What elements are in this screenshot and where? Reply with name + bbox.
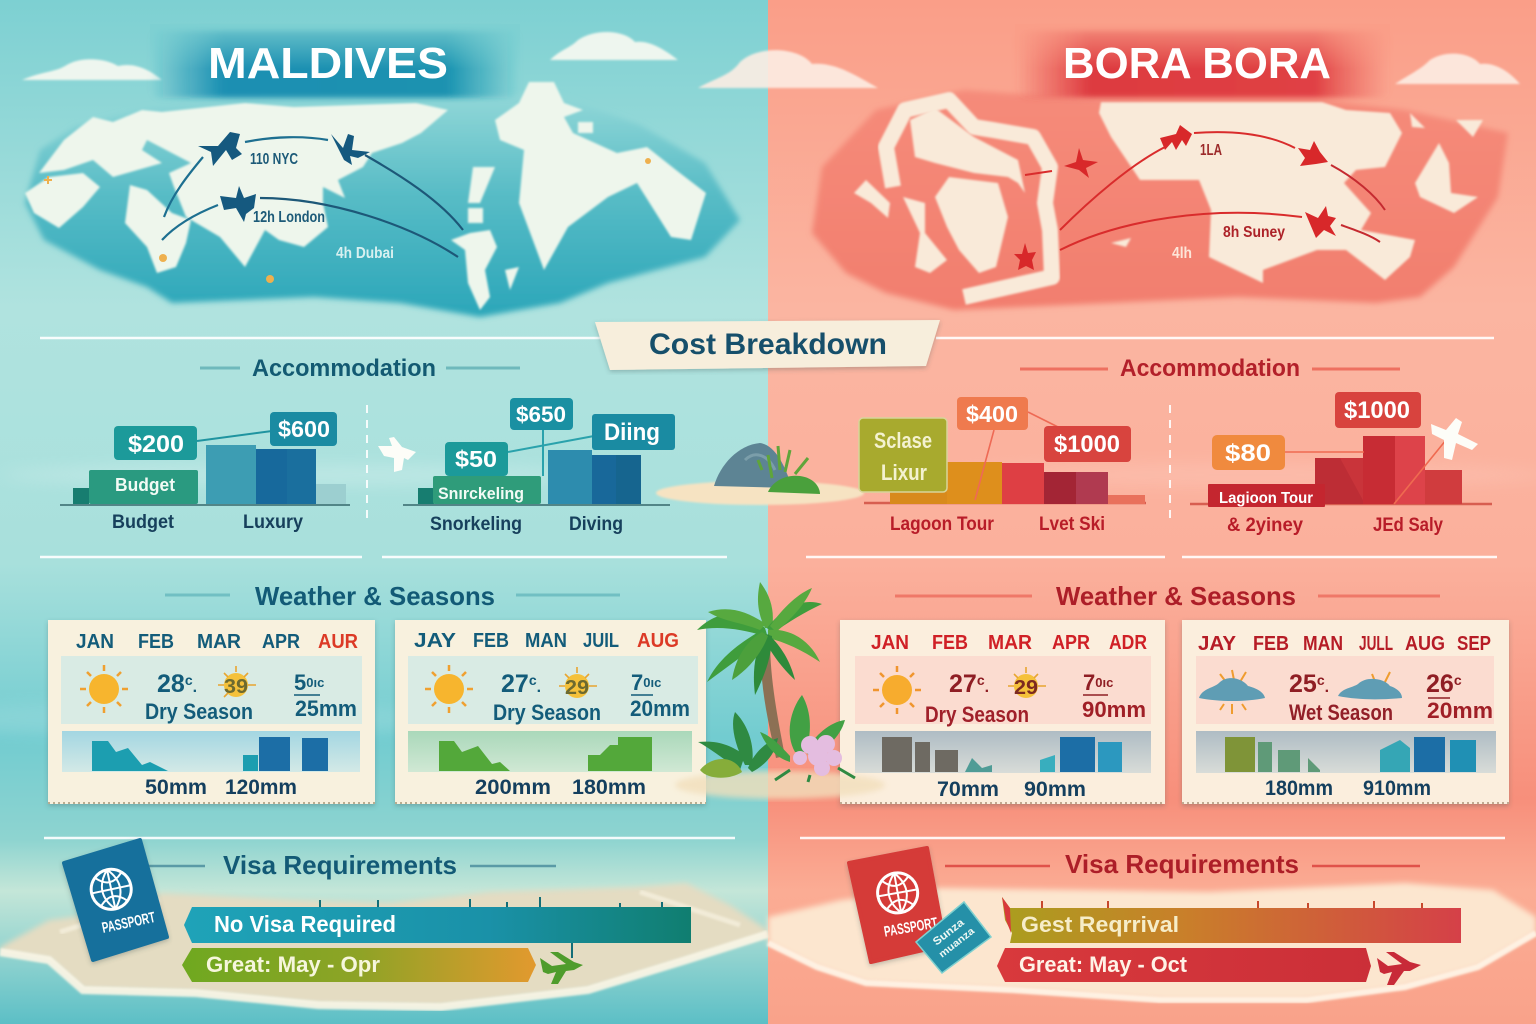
weather card: Maldives 2 — [395, 620, 706, 804]
weather card: Bora Bora 1: APR — [1052, 632, 1090, 654]
weather card: Maldives 1: 120mm — [225, 776, 297, 799]
weather card: Bora Bora 1: 70mm — [937, 778, 999, 801]
value tag: $1000: $1000 — [1054, 431, 1120, 458]
value tag: $1000 — [1335, 392, 1421, 428]
heading: Weather & Seasons (Maldives): Weather & Seasons — [255, 581, 495, 611]
value tag: $650 — [510, 398, 573, 430]
heading ribbon: Cost Breakdown: Cost Breakdown — [649, 328, 887, 361]
background: Bora Bora side — [768, 0, 1536, 1024]
icon: small sun 29 — [559, 667, 597, 699]
weather card: Maldives 2: MAN — [525, 630, 567, 652]
icon: white plane (Bora Bora cost) — [1431, 418, 1478, 460]
bar chart: Maldives activities — [403, 398, 675, 535]
timing bar: Great May - Oct — [997, 948, 1371, 982]
weather card: Maldives 2: . — [537, 679, 541, 696]
weather card: Maldives 2: JUIL — [583, 630, 619, 652]
weather card: Bora Bora 1: JAN — [871, 632, 909, 654]
weather card: Bora Bora 1: . — [985, 679, 989, 696]
flight labels: 4lh — [1172, 245, 1192, 262]
world map: Bora Bora flights — [812, 90, 1508, 310]
title banner: BORA BORA: BORA BORA — [1063, 39, 1331, 88]
heading: Visa Requirements (Maldives): Visa Requirements — [223, 850, 457, 880]
weather card: Maldives 1: JAN — [76, 631, 114, 653]
value tag: $200 — [114, 426, 197, 460]
plane icons — [198, 132, 370, 222]
bar chart: Bora Bora activities: JEd Saly — [1373, 515, 1443, 536]
weather card: Bora Bora 2: 20mm — [1427, 698, 1493, 723]
icon: small sun 29: 29 — [565, 677, 589, 699]
visa bar: No Visa Required — [184, 897, 691, 958]
value tag: Diing: Diing — [604, 419, 660, 446]
bar chart: Maldives activities: Snırckeling — [438, 484, 524, 503]
weather card: Maldives 2: 7 — [631, 670, 643, 695]
weather card: Maldives 1: FEB — [138, 631, 174, 653]
weather card: Maldives 1: 50mm — [145, 776, 207, 799]
flight route lines — [162, 137, 463, 257]
illustration: palm tree island — [675, 582, 885, 799]
weather card: Maldives 1: MAR — [197, 631, 242, 653]
bar chart: Maldives activities: Diving — [569, 514, 623, 535]
icon: visa stamp card: muanza — [937, 926, 977, 960]
icon: cloud with sun small — [1338, 672, 1402, 699]
weather card: Maldives 2: AUG — [637, 630, 679, 652]
icon: green plane — [540, 952, 583, 984]
weather card: Bora Bora 2: 26 — [1426, 670, 1454, 698]
heading ribbon: Cost Breakdown — [595, 320, 940, 370]
visa bar: No Visa Required: No Visa Required — [214, 911, 396, 937]
background: Maldives side — [0, 0, 768, 1024]
bottom beach: Bora Bora — [768, 883, 1536, 1000]
value tag: $600: $600 — [278, 416, 330, 442]
icon: sun — [80, 665, 128, 713]
weather card: Maldives 2: c — [529, 672, 537, 688]
weather card: Maldives 2: 0ıc — [643, 675, 661, 690]
bar chart: Bora Bora activities: & 2yiney — [1227, 515, 1303, 536]
bar chart: Bora Bora accommodation — [859, 397, 1146, 535]
weather card: Bora Bora 2: c — [1454, 672, 1462, 688]
weather card: Bora Bora 1: 7 — [1083, 670, 1095, 695]
weather card: Maldives 2: 20mm — [630, 696, 690, 721]
icon: visa stamp card: Sunza — [931, 916, 967, 948]
weather card: Bora Bora 1 — [840, 620, 1165, 804]
title banner: BORA BORA — [1015, 24, 1390, 98]
value tag: Diing — [592, 414, 675, 450]
weather card: Maldives 2: 27 — [501, 670, 529, 698]
timing bar: Great May - Opr: Great: May - Opr — [206, 952, 380, 977]
heading: Visa Requirements (Bora Bora): Visa Requirements — [1065, 849, 1299, 879]
weather card: Maldives 1: Dry Season — [145, 699, 253, 724]
weather card: Maldives 1: 28 — [157, 670, 185, 698]
weather card: Bora Bora 2: FEB — [1253, 633, 1289, 655]
value tag: $400 — [957, 397, 1028, 430]
weather card: Bora Bora 1: c — [977, 672, 985, 688]
bar chart: Bora Bora activities — [1190, 392, 1492, 536]
label box: Selase Luxur: Lixur — [881, 460, 927, 485]
weather card: Maldives 1: APR — [262, 631, 300, 653]
weather card: Bora Bora 2: . — [1325, 679, 1329, 696]
weather card: Bora Bora 1: FEB — [932, 632, 968, 654]
bar chart: Bora Bora accommodation: Lagoon Tour — [890, 514, 995, 535]
value tag: $1000 — [1044, 426, 1131, 462]
timing bar: Great May - Opr — [182, 948, 536, 982]
value tag: $400: $400 — [966, 401, 1018, 427]
icon: sun — [425, 665, 473, 713]
weather card: Bora Bora 1: 0ıc — [1095, 675, 1113, 690]
weather card: Bora Bora 1: Dry Season — [925, 702, 1029, 727]
weather card: Bora Bora 2: AUG — [1405, 633, 1445, 655]
weather card: Bora Bora 2: MAN — [1303, 633, 1343, 655]
weather card: Maldives 2: FEB — [473, 630, 509, 652]
weather card: Maldives 2: 180mm — [572, 776, 646, 799]
weather card: Maldives 1: AUR — [318, 631, 359, 653]
weather card: Bora Bora 2: c — [1317, 672, 1325, 688]
value tag: $50 — [445, 442, 508, 476]
value tag: $50: $50 — [455, 446, 497, 472]
flight labels — [250, 151, 394, 262]
visa bar: Gest Reqrrival — [1002, 897, 1461, 943]
world map: Maldives flights — [25, 82, 740, 317]
value tag: $600 — [270, 412, 337, 446]
weather card: Bora Bora 2: 180mm — [1265, 777, 1333, 800]
icon: small sun 39 — [218, 666, 256, 698]
weather card: Maldives 1: 0ıc — [306, 675, 324, 690]
weather card: Maldives 1: . — [193, 679, 197, 696]
icon: passport (Bora Bora) — [849, 848, 945, 962]
value tag: $200: $200 — [128, 431, 184, 458]
weather card: Bora Bora 2: Wet Season — [1289, 700, 1393, 725]
weather card: Bora Bora 2: JAY — [1198, 633, 1237, 655]
flight route lines — [1025, 132, 1385, 250]
value tag: $650: $650 — [516, 402, 566, 427]
weather card: Bora Bora 1: 90mm — [1082, 697, 1146, 722]
icon: passport (Maldives): PASSPORT — [100, 909, 157, 937]
bar chart: Maldives activities: Snorkeling — [430, 514, 522, 535]
weather card: Bora Bora 1: 90mm — [1024, 778, 1086, 801]
bar chart: Bora Bora accommodation: Lvet Ski — [1039, 514, 1105, 535]
icon: sun — [873, 666, 921, 714]
small orange markers — [44, 158, 651, 283]
flight labels: 8h Suney — [1223, 224, 1285, 241]
icon: small sun 29: 29 — [1014, 677, 1038, 699]
visa bar: Gest Reqrrival: Gest Reqrrival — [1021, 912, 1179, 937]
icon: passport (Bora Bora): PASSPORT — [883, 915, 939, 941]
plane icons — [1014, 125, 1336, 270]
weather card: Maldives 1 — [48, 620, 375, 804]
bar chart: Maldives accommodation: Budget — [115, 475, 175, 495]
heading: Weather & Seasons (Bora Bora): Weather & Seasons — [1056, 581, 1296, 611]
icon: small sun 39: 39 — [224, 676, 248, 698]
weather card: Bora Bora 2: JULL — [1359, 633, 1393, 655]
timing bar: Great May - Oct: Great: May - Oct — [1019, 952, 1188, 977]
flight labels: 1LA — [1200, 142, 1222, 159]
weather card: Bora Bora 2: 25 — [1289, 670, 1317, 698]
weather card: Bora Bora 2: 910mm — [1363, 777, 1431, 800]
title banner: MALDIVES: MALDIVES — [208, 39, 448, 88]
clouds — [22, 32, 1520, 88]
weather card: Maldives 2: 200mm — [475, 776, 551, 799]
heading: Accommodation (Bora Bora): Accommodation — [1120, 355, 1300, 382]
bottom beach: Maldives — [0, 883, 768, 1007]
weather card: Bora Bora 2 — [1182, 620, 1509, 804]
bar chart: Maldives accommodation: Budget — [112, 512, 175, 533]
flight labels: 4h Dubai — [336, 245, 394, 262]
weather card: Bora Bora 2: SEP — [1457, 633, 1491, 655]
icon: visa stamp card — [916, 902, 991, 973]
weather card: Bora Bora 1: ADR — [1109, 632, 1147, 654]
label box: Selase Luxur: Sclase — [874, 428, 932, 453]
weather card: Bora Bora 1: 27 — [949, 670, 977, 698]
icon: white plane (Maldives cost) — [378, 437, 416, 472]
flight labels: 12h London — [253, 209, 325, 226]
label box: Selase Luxur — [859, 418, 947, 492]
weather card: Maldives 2: JAY — [414, 630, 457, 652]
bar chart: Maldives accommodation — [60, 412, 350, 533]
value tag: $80: $80 — [1225, 440, 1271, 467]
flight labels: 110 NYC — [250, 151, 298, 168]
icon: red plane — [1377, 952, 1421, 985]
value tag: $80 — [1212, 435, 1285, 470]
weather card: Maldives 1: 5 — [294, 670, 306, 695]
flight labels — [1172, 142, 1285, 262]
bar chart: Bora Bora activities: Lagioon Tour — [1219, 490, 1313, 507]
title banner: MALDIVES — [150, 24, 520, 98]
weather card: Maldives 1: 25mm — [295, 696, 357, 721]
icon: cloud with sun — [1199, 670, 1265, 714]
icon: small island — [656, 443, 864, 505]
weather card: Maldives 2: Dry Season — [493, 700, 601, 725]
value tag: $1000: $1000 — [1344, 397, 1410, 424]
bar chart: Maldives accommodation: Luxury — [243, 512, 303, 533]
icon: passport (Maldives) — [64, 840, 167, 960]
icon: small sun 29 — [1008, 667, 1046, 699]
weather card: Maldives 1: c — [185, 672, 193, 688]
heading: Accommodation (Maldives): Accommodation — [252, 355, 436, 382]
weather card: Bora Bora 1: MAR — [988, 632, 1033, 654]
